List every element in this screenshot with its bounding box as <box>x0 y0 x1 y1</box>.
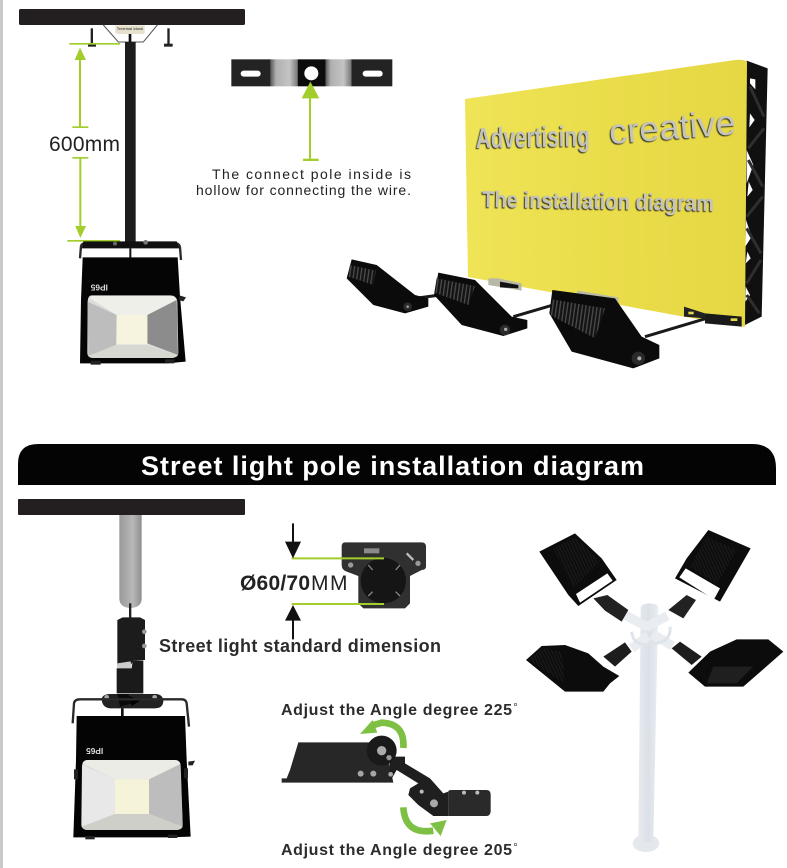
mounting plate with hollow hole <box>231 59 392 161</box>
600mm dimension arrows <box>67 43 120 242</box>
black dimension arrows <box>285 523 301 558</box>
sign text <box>476 103 737 216</box>
slip fitter socket <box>342 542 426 608</box>
diagram: adjustable bracket side view <box>282 720 491 836</box>
wall brackets <box>488 278 522 291</box>
green dimension lines <box>292 558 384 604</box>
label: standard dimension: Street light standard dimension <box>159 636 441 656</box>
text: hollow connect pole note: The connect pole inside is <box>212 166 411 182</box>
text: hollow connect pole note <box>196 166 411 198</box>
upper left light <box>539 533 628 622</box>
light 1 <box>347 259 428 313</box>
diagram: pole socket dimension <box>285 523 426 639</box>
label: adjust angle 205: Adjust the Angle degree 205 <box>281 842 512 859</box>
header bar: street light section <box>18 499 245 515</box>
white cross arms <box>625 615 673 648</box>
section title text: Street light pole installation diagram <box>141 451 644 481</box>
flood light front view <box>80 240 186 365</box>
lower right light <box>672 639 783 687</box>
flood light front view: IP65 <box>90 283 108 293</box>
slip fitter end <box>448 790 491 816</box>
lights and brackets, in zoomed coordinates <box>347 259 742 368</box>
advertising billboard with three flood lights <box>347 60 768 368</box>
billboard truss frame <box>742 61 768 327</box>
section title band <box>18 444 776 485</box>
text: hollow connect pole note: hollow for connecting the wire. <box>196 182 411 198</box>
sign text: The installation diagram <box>482 186 714 216</box>
sign text: creative <box>608 103 737 152</box>
white pole <box>633 835 659 852</box>
terminal block and mounting wires: Terminal block <box>117 27 143 31</box>
pivot disc <box>367 736 397 766</box>
light 3 <box>549 290 659 368</box>
flood light side body <box>282 742 393 783</box>
header bar: top section <box>19 9 245 25</box>
adjustable arm <box>390 757 448 816</box>
grey pole <box>119 515 142 608</box>
flood light front view <box>73 699 195 839</box>
diagram: four flood lights on white pole <box>526 530 783 852</box>
light 2 <box>434 273 527 336</box>
label: pole diameter: MM <box>311 572 349 595</box>
lower left light <box>526 642 632 692</box>
diagram: flood light on grey street pole <box>73 515 195 839</box>
green rotation arrow top <box>360 720 403 748</box>
sign text: Advertising <box>476 121 590 155</box>
yellow sign panel <box>465 60 747 327</box>
label: pole diameter: Ø60/70 <box>240 572 310 595</box>
diagram: suspended flood light with 600mm pole <box>67 25 186 365</box>
left page edge stripe <box>0 0 3 868</box>
green rotation arrow bottom <box>403 807 447 836</box>
slip fitter adapter <box>102 617 163 708</box>
label: adjust angle 225: Adjust the Angle degree 225 <box>281 702 512 719</box>
connector rods <box>415 295 707 337</box>
flood light front view: IP65 <box>86 746 103 756</box>
terminal block and mounting wires <box>88 25 173 47</box>
label: 600mm: 600mm <box>49 133 120 156</box>
upper right light <box>668 530 751 618</box>
green arrow pointing to hole <box>302 82 319 161</box>
connecting pole <box>125 42 136 245</box>
